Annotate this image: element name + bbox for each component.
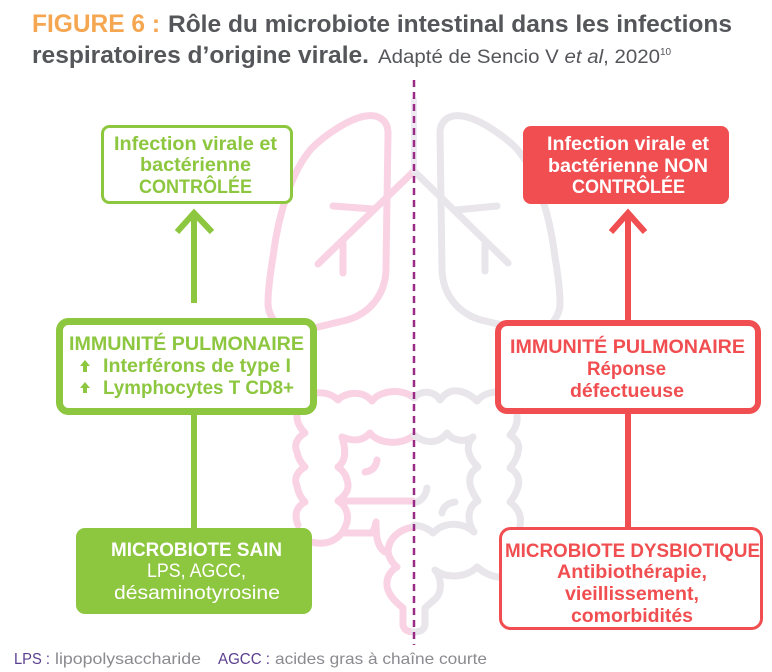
title bbox=[32, 10, 732, 69]
panel: healthy microbiota: LPS, AGCC, bbox=[147, 561, 246, 582]
connector: red microbiota to immunity bbox=[625, 414, 631, 528]
panel: defective pulmonary immunity: Réponse bbox=[587, 359, 666, 380]
panel: uncontrolled infection: Infection virale et bbox=[547, 134, 710, 155]
legend: abbreviations: acides gras à chaîne courte bbox=[275, 651, 487, 668]
panel: dysbiotic microbiota: comorbidités bbox=[571, 606, 693, 627]
title: Adapté de Sencio V et al, 2020 bbox=[378, 47, 660, 68]
arrow: red upward to uncontrolled infection bbox=[611, 213, 645, 320]
panel: healthy microbiota bbox=[76, 528, 312, 614]
panel: healthy pulmonary immunity: Lymphocytes T CD8+ bbox=[103, 378, 294, 399]
panel: dysbiotic microbiota: Antibiothérapie, bbox=[557, 562, 707, 583]
panel: dysbiotic microbiota bbox=[500, 528, 762, 628]
legend: abbreviations bbox=[14, 651, 487, 668]
title: FIGURE 6 : bbox=[32, 10, 160, 38]
panel: dysbiotic microbiota: vieillissement, bbox=[565, 584, 699, 605]
panel: healthy pulmonary immunity bbox=[60, 322, 314, 412]
panel: controlled infection bbox=[102, 126, 292, 202]
panel: healthy microbiota: MICROBIOTE SAIN bbox=[111, 540, 282, 561]
icon: intestine, gray half bbox=[414, 391, 521, 632]
panel: controlled infection: bactérienne bbox=[140, 155, 251, 176]
legend: abbreviations: AGCC : bbox=[218, 651, 270, 668]
panel: controlled infection: Infection virale et bbox=[114, 134, 278, 155]
icon: left lung bbox=[268, 116, 413, 327]
icon: intestine, pink half bbox=[296, 392, 414, 632]
panel: uncontrolled infection bbox=[523, 126, 729, 204]
panel: healthy pulmonary immunity: IMMUNITÉ PULMONAIRE bbox=[69, 333, 304, 355]
panel: healthy pulmonary immunity: Interférons de type I bbox=[103, 356, 291, 377]
title: respiratoires d’origine virale. bbox=[32, 42, 369, 69]
icon: right lung bbox=[414, 100, 560, 327]
panel: defective pulmonary immunity: défectueuse bbox=[570, 381, 684, 402]
connector: green microbiota to immunity bbox=[191, 414, 197, 528]
panel: controlled infection: CONTRÔLÉE bbox=[139, 176, 252, 198]
panel: dysbiotic microbiota: MICROBIOTE DYSBIOTIQUE bbox=[505, 541, 760, 562]
panel: healthy microbiota: désaminotyrosine bbox=[114, 583, 280, 604]
legend: abbreviations: LPS : bbox=[14, 651, 50, 668]
icon: up arrow lymphocytes bbox=[80, 382, 90, 393]
title: Rôle du microbiote intestinal dans les infections bbox=[168, 11, 732, 38]
panel: uncontrolled infection: CONTRÔLÉE bbox=[572, 176, 685, 198]
title: 10 bbox=[660, 47, 672, 58]
legend: abbreviations: lipopolysaccharide bbox=[55, 651, 201, 668]
arrow: green upward to controlled infection bbox=[177, 213, 212, 303]
icon: up arrow interferons bbox=[80, 360, 90, 372]
panel: defective pulmonary immunity: IMMUNITÉ PULMONAIRE bbox=[510, 336, 745, 358]
panel: defective pulmonary immunity bbox=[498, 323, 758, 411]
center dashed divider bbox=[413, 80, 415, 645]
panel: uncontrolled infection: bactérienne NON bbox=[548, 156, 708, 177]
